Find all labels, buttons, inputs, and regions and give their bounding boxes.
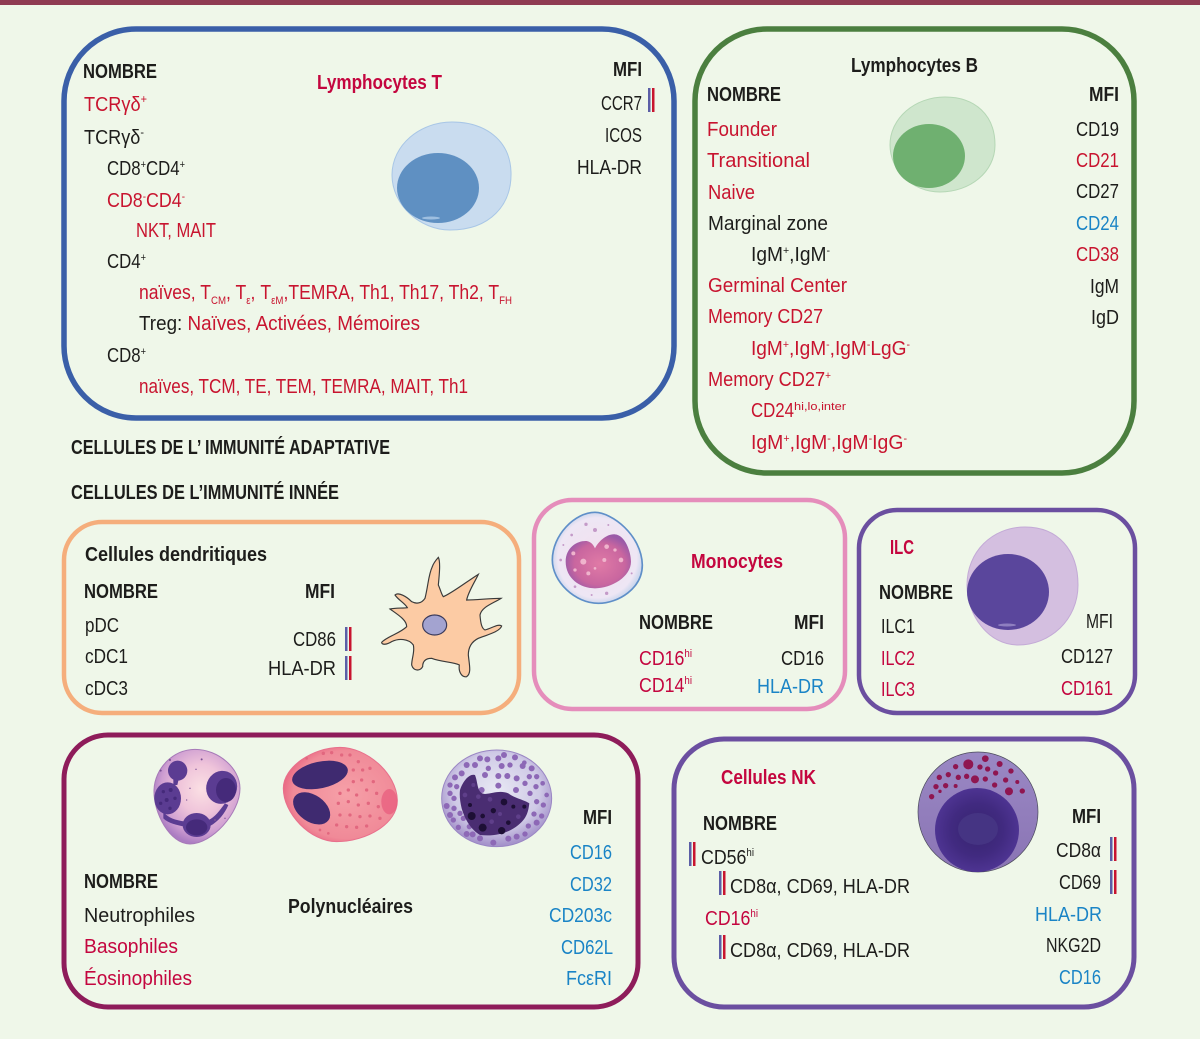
- title: ILC: [890, 537, 914, 559]
- icon: basophil: [442, 750, 552, 847]
- list: nombre: Naive: [708, 182, 755, 204]
- heading: NOMBRE: NOMBRE: [703, 813, 777, 835]
- list: MFI: CD62L: [561, 937, 613, 959]
- list: MFI: CD16: [781, 648, 824, 670]
- icon: B lymphocyte: [890, 97, 995, 192]
- heading: NOMBRE: NOMBRE: [639, 612, 713, 634]
- list: nombre: [639, 648, 692, 697]
- list: MFI: HLA-DR: [577, 157, 642, 179]
- panel border: [534, 500, 845, 709]
- heading: MFI: MFI: [583, 807, 612, 829]
- list: nombre: -: [867, 339, 871, 351]
- heading: innate immunity: CELLULES DE L’IMMUNITÉ INNÉE: [71, 481, 339, 504]
- list: nombre: -: [143, 191, 146, 203]
- list: nombre: LgG: [870, 338, 906, 360]
- list: MFI: NKG2D: [1046, 935, 1101, 957]
- list: nombre: hi: [684, 648, 692, 660]
- list: nombre: TCRγδ: [84, 127, 146, 149]
- list: nombre: CD4: [146, 158, 180, 180]
- list: nombre: +: [180, 159, 185, 171]
- list: nombre: naïves, TCM, TE, TEM, TEMRA, MAIT, Th1: [139, 376, 468, 398]
- heading: MFI: MFI: [613, 59, 642, 81]
- list: nombre: CD8α, CD69, HLA-DR: [730, 940, 910, 962]
- list: nombre: [881, 616, 915, 701]
- list: nombre: IgM: [751, 432, 784, 454]
- list: MFI: [268, 629, 336, 680]
- list: nombre: cDC1: [85, 646, 128, 668]
- list: MFI: CD24: [1076, 213, 1119, 235]
- list: nombre: ILC3: [881, 679, 915, 701]
- title: Monocytes: [691, 551, 783, 573]
- heading: MFI: MFI: [794, 612, 824, 634]
- list: nombre: +: [141, 92, 147, 106]
- list: nombre: Memory CD27: [708, 306, 823, 328]
- list: nombre: naïves, T: [139, 282, 221, 304]
- list: nombre: Neutrophiles: [84, 905, 195, 927]
- list: nombre: , T: [226, 282, 246, 304]
- list: nombre: ε: [246, 295, 251, 307]
- list: MFI: [1061, 611, 1113, 700]
- panel: Monocytes: [534, 500, 845, 709]
- list: nombre: CM: [211, 295, 226, 307]
- panel: Cellules dendritiques: [64, 522, 519, 713]
- list: MFI: CCR7: [601, 93, 642, 115]
- list: nombre: CD16: [639, 648, 690, 670]
- list: nombre: -: [827, 433, 831, 445]
- list: nombre: [84, 92, 512, 398]
- list: nombre: hi: [750, 908, 758, 920]
- icon: NK cell: [918, 752, 1038, 872]
- icon: neutrophil: [154, 749, 242, 844]
- list: nombre: ILC1: [881, 616, 915, 638]
- list: nombre: εM: [271, 295, 283, 307]
- list: nombre: hi,lo,inter: [794, 401, 846, 413]
- list: nombre: IgM: [751, 338, 784, 360]
- list: MFI: IgM: [1090, 276, 1119, 298]
- list: nombre: pDC: [85, 615, 119, 637]
- list: nombre: -: [903, 433, 907, 445]
- list: nombre: +: [783, 339, 789, 351]
- panel border: [695, 29, 1134, 473]
- title: Lymphocytes T: [317, 72, 442, 94]
- icon: eosinophil: [283, 747, 397, 842]
- list: MFI: CD203c: [549, 905, 612, 927]
- list: MFI: CD21: [1076, 150, 1119, 172]
- list: nombre: ,IgM: [789, 338, 826, 360]
- heading: NOMBRE: NOMBRE: [84, 581, 158, 603]
- list: nombre: CD56: [701, 847, 752, 869]
- icon: T lymphocyte: [392, 122, 511, 230]
- list: nombre: CD8α, CD69, HLA-DR: [730, 876, 910, 898]
- heading: MFI: MFI: [305, 581, 335, 603]
- list: nombre: CD8: [107, 345, 147, 367]
- list: nombre: IgG: [872, 432, 903, 454]
- list: MFI: HLA-DR: [1035, 904, 1102, 926]
- list: MFI: [577, 93, 642, 179]
- icon: ILC: [967, 527, 1078, 645]
- list: nombre: Memory CD27: [708, 369, 837, 391]
- list: nombre: +: [825, 370, 831, 382]
- list: nombre: Treg: Naïves, Activées, Mémoires: [139, 313, 420, 335]
- list: MFI: [1035, 837, 1116, 989]
- panel border: [64, 29, 674, 418]
- icon: double bar: [648, 88, 654, 112]
- list: nombre: +: [783, 245, 789, 257]
- list: MFI: IgD: [1091, 307, 1119, 329]
- list: nombre: CD4: [146, 190, 182, 212]
- list: nombre: +: [141, 346, 146, 358]
- list: nombre: FH: [499, 295, 512, 307]
- title: Cellules dendritiques: [85, 544, 267, 566]
- list: MFI: CD38: [1076, 244, 1119, 266]
- title: Polynucléaires: [288, 896, 413, 918]
- list: nombre: Marginal zone: [708, 213, 828, 235]
- list: MFI: CD69: [1059, 872, 1101, 894]
- list: MFI: [1076, 119, 1119, 329]
- panel border: [64, 522, 519, 713]
- list: nombre: -: [869, 433, 872, 445]
- panel: Cellules NK: [674, 739, 1134, 1007]
- list: nombre: Éosinophiles: [84, 967, 192, 990]
- panel border: [64, 735, 638, 1007]
- list: nombre: Basophiles: [84, 936, 178, 958]
- list: nombre: ILC2: [881, 648, 915, 670]
- list: nombre: [85, 615, 128, 700]
- list: nombre: hi: [684, 675, 692, 687]
- icon: double bars: [345, 627, 352, 680]
- list: nombre: ,TEMRA, Th1, Th17, Th2, T: [283, 282, 499, 304]
- list: nombre: NKT, MAIT: [136, 220, 216, 242]
- list: nombre: CD24: [751, 400, 794, 422]
- panel: ILC: [859, 510, 1135, 713]
- list: MFI: CD32: [570, 874, 612, 896]
- list: nombre: cDC3: [85, 678, 128, 700]
- panel: Polynucléaires: [64, 735, 638, 1007]
- list: nombre: +: [783, 433, 790, 445]
- list: nombre: ,IgM: [830, 338, 867, 360]
- list: nombre: Transitional: [707, 150, 810, 172]
- title: Lymphocytes B: [851, 55, 978, 77]
- list: nombre: ,IgM: [831, 432, 869, 454]
- list: MFI: CD16: [570, 842, 612, 864]
- list: nombre: Germinal Center: [708, 275, 847, 297]
- list: nombre: -: [906, 339, 910, 351]
- heading: NOMBRE: NOMBRE: [879, 582, 953, 604]
- list: nombre: -: [826, 339, 830, 351]
- list: nombre: CD8: [107, 158, 147, 180]
- list: MFI: CD127: [1061, 646, 1113, 668]
- list: nombre: -: [140, 125, 144, 139]
- list: nombre: -: [826, 245, 830, 257]
- list: MFI: CD86: [293, 629, 336, 651]
- heading: NOMBRE: NOMBRE: [707, 84, 781, 106]
- list: MFI: MFI: [1086, 611, 1113, 633]
- heading: adaptive immunity: CELLULES DE L’ IMMUNITÉ ADAPTATIVE: [71, 436, 390, 459]
- list: nombre: -: [182, 191, 185, 203]
- list: MFI: [757, 648, 824, 698]
- list: nombre: CD16: [705, 908, 756, 930]
- list: nombre: , T: [251, 282, 271, 304]
- list: MFI: ICOS: [605, 125, 642, 147]
- list: nombre: CD8: [107, 190, 147, 212]
- icon: monocyte: [552, 512, 642, 603]
- panel border: [674, 739, 1134, 1007]
- list: nombre: CD14: [639, 675, 690, 697]
- list: MFI: CD8α: [1056, 840, 1101, 862]
- panel: Lymphocytes B: [695, 29, 1134, 473]
- list: nombre: ,IgM: [790, 432, 827, 454]
- list: MFI: FcεRI: [566, 968, 612, 990]
- heading: MFI: MFI: [1072, 806, 1101, 828]
- heading: NOMBRE: NOMBRE: [84, 871, 158, 893]
- list: MFI: CD27: [1076, 181, 1119, 203]
- list: nombre: Founder: [707, 119, 777, 141]
- list: MFI: CD19: [1076, 119, 1119, 141]
- icon: dendritic cell: [382, 557, 502, 677]
- list: MFI: HLA-DR: [757, 676, 824, 698]
- list: MFI: CD161: [1061, 678, 1113, 700]
- panel: Lymphocytes T: [64, 29, 674, 418]
- list: nombre: CD4: [107, 251, 147, 273]
- list: nombre: ,IgM: [789, 244, 826, 266]
- list: nombre: TCRγδ: [84, 94, 146, 116]
- heading: MFI: MFI: [1089, 84, 1119, 106]
- top bar: [0, 0, 1200, 5]
- list: MFI: [549, 842, 613, 990]
- list: MFI: HLA-DR: [268, 658, 336, 680]
- list: nombre: [84, 905, 195, 990]
- list: nombre: IgM: [751, 244, 784, 266]
- heading: NOMBRE: NOMBRE: [83, 61, 157, 83]
- list: nombre: [689, 842, 910, 962]
- list: nombre: hi: [746, 847, 754, 859]
- list: nombre: [707, 119, 910, 454]
- title: Cellules NK: [721, 767, 816, 789]
- list: nombre: +: [141, 159, 146, 171]
- list: MFI: CD16: [1059, 967, 1101, 989]
- panel border: [859, 510, 1135, 713]
- list: nombre: +: [141, 252, 146, 264]
